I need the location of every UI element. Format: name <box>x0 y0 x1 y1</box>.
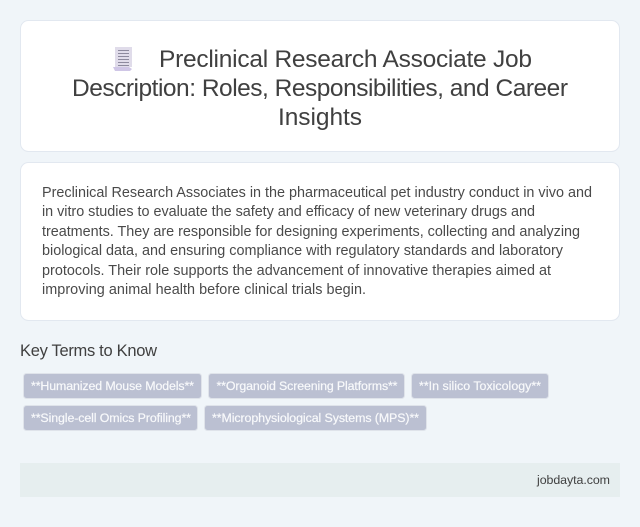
chip: humanized mouse models: **Humanized Mouse Models** <box>31 379 194 393</box>
title heading: Description: Roles, Responsibilities, and Career <box>72 75 568 102</box>
title heading: Preclinical Research Associate Job <box>159 46 532 73</box>
chip: organoid screening platforms: **Organoid Screening Platforms** <box>216 379 398 393</box>
description text: improving animal health before clinical trials begin. <box>42 282 366 298</box>
chip: organoid screening platforms <box>208 374 404 398</box>
chip: single-cell omics profiling <box>24 406 198 430</box>
chip: in silico toxicology: **In silico Toxicology** <box>419 379 541 393</box>
heading: key terms: Key Terms to Know <box>20 342 157 360</box>
title heading: Insights <box>278 104 362 131</box>
chip: microphysiological systems <box>204 406 426 430</box>
description text: Preclinical Research Associates in the pharmaceutical pet industry conduct in vivo and <box>42 185 592 201</box>
description text: protocols. Their role supports the advancement of innovative therapies aimed at <box>42 263 551 279</box>
title heading <box>72 46 568 131</box>
description text: in vitro studies to evaluate the safety and efficacy of new veterinary drugs and <box>42 204 535 220</box>
description text: biological data, and ensuring compliance with regulatory standards and laboratory <box>42 243 564 259</box>
description text: treatments. They are responsible for designing experiments, collecting and analyzing <box>42 224 580 240</box>
footer bar <box>20 463 620 497</box>
panel: description <box>20 162 620 320</box>
chip: single-cell omics profiling: **Single-cell Omics Profiling** <box>31 411 191 425</box>
description text <box>42 185 592 298</box>
chip: humanized mouse models <box>24 374 202 398</box>
icon: receipt <box>113 47 132 71</box>
title panel <box>20 20 620 152</box>
chip: in silico toxicology <box>412 374 548 398</box>
chip: microphysiological systems: **Microphysiological Systems (MPS)** <box>212 411 419 425</box>
key term chips <box>24 374 548 430</box>
footer text: jobdayta.com <box>536 473 610 487</box>
